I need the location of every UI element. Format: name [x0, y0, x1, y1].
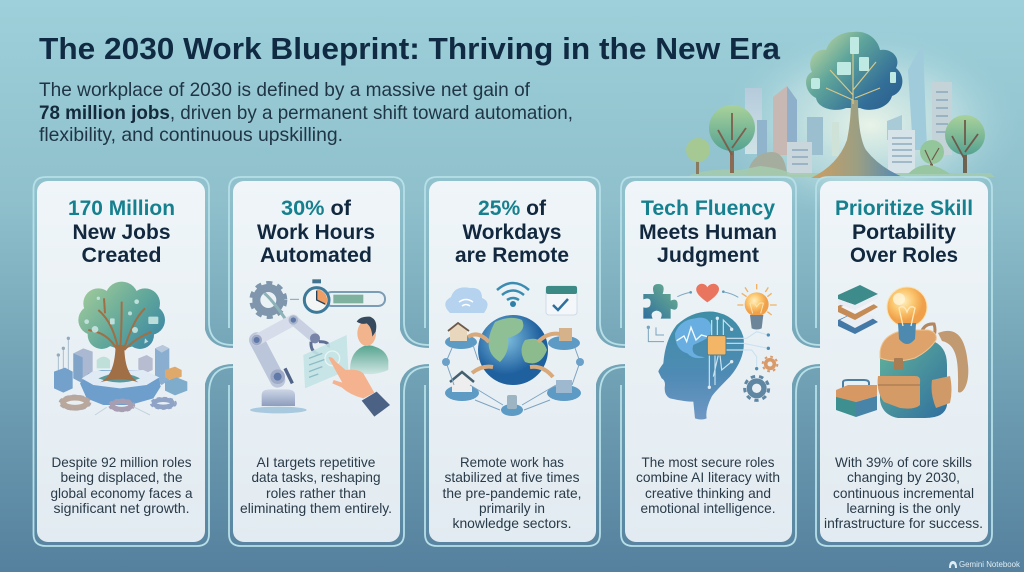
description: knowledge sectors. — [452, 515, 572, 531]
heading: 30% of — [281, 197, 352, 220]
description — [240, 454, 392, 516]
description: emotional intelligence. — [640, 500, 776, 516]
description — [50, 454, 193, 516]
heading: Over Roles — [850, 244, 958, 267]
heading: Work Hours — [257, 221, 375, 244]
panel: tech fluency — [636, 197, 780, 516]
panel: 25% remote — [442, 197, 584, 531]
description: combine AI literacy with — [636, 469, 780, 485]
description: significant net growth. — [54, 500, 190, 516]
heading: 25% of — [478, 197, 547, 220]
description: being displaced, the — [60, 469, 183, 485]
description: creative thinking and — [645, 485, 771, 501]
description: eliminating them entirely. — [240, 500, 392, 516]
right trees — [908, 115, 985, 174]
heading: Created — [82, 244, 162, 267]
title: The 2030 Work Blueprint: Thriving in the New Era — [39, 31, 781, 66]
heading: Tech Fluency — [641, 197, 775, 220]
description: roles rather than — [266, 485, 366, 501]
description: changing by 2030, — [847, 469, 960, 485]
heading — [455, 197, 569, 267]
description: primarily in — [479, 500, 545, 516]
icon: robot arm, stopwatch and person — [250, 279, 390, 417]
icon: head, brain and ideas — [643, 284, 777, 419]
heading — [257, 197, 375, 267]
heading: New Jobs — [72, 221, 170, 244]
description: stabilized at five times — [444, 469, 580, 485]
left trees — [686, 105, 755, 174]
heading: Workdays — [462, 221, 562, 244]
intro text: The workplace of 2030 is defined by a massive net gain of — [39, 79, 531, 101]
description — [636, 454, 780, 516]
icon: tree on gears — [54, 282, 187, 415]
icon: globe and connected homes — [442, 283, 584, 416]
description — [442, 454, 582, 531]
heading: Meets Human — [639, 221, 777, 244]
illustration: futuristic city with circuit tree — [686, 30, 1020, 220]
watermark: Gemini Notebook: Gemini Notebook — [959, 560, 1021, 569]
heading: Automated — [260, 244, 372, 267]
description — [824, 454, 983, 531]
description: global economy faces a — [50, 485, 193, 501]
icon: backpack, bulb, books and toolbox — [836, 285, 968, 418]
description: infrastructure for success. — [824, 515, 983, 531]
description: AI targets repetitive — [256, 454, 376, 470]
description: learning is the only — [846, 500, 960, 516]
intro text: flexibility, and continuous upskilling. — [39, 124, 343, 146]
heading — [639, 197, 777, 267]
intro text — [39, 79, 573, 146]
description: With 39% of core skills — [835, 454, 972, 470]
heading — [68, 197, 175, 267]
description: Despite 92 million roles — [52, 454, 192, 470]
panel: 170 million jobs — [50, 197, 193, 516]
description: the pre-pandemic rate, — [442, 485, 582, 501]
description: The most secure roles — [642, 454, 774, 470]
description: continuous incremental — [833, 485, 974, 501]
description: Remote work has — [460, 454, 564, 470]
heading: Prioritize Skill — [835, 197, 973, 220]
panel: 30% automated — [240, 197, 392, 516]
circuit tree — [806, 32, 905, 178]
description: data tasks, reshaping — [252, 469, 380, 485]
panels with connectors — [34, 177, 992, 546]
heading: Portability — [852, 221, 956, 244]
heading: are Remote — [455, 244, 569, 267]
panel: skill portability — [824, 197, 983, 531]
heading: Judgment — [657, 244, 759, 267]
heading — [835, 197, 973, 267]
intro text: 78 million jobs, driven by a permanent shift toward automation, — [39, 102, 573, 124]
heading: 170 Million — [68, 197, 175, 220]
